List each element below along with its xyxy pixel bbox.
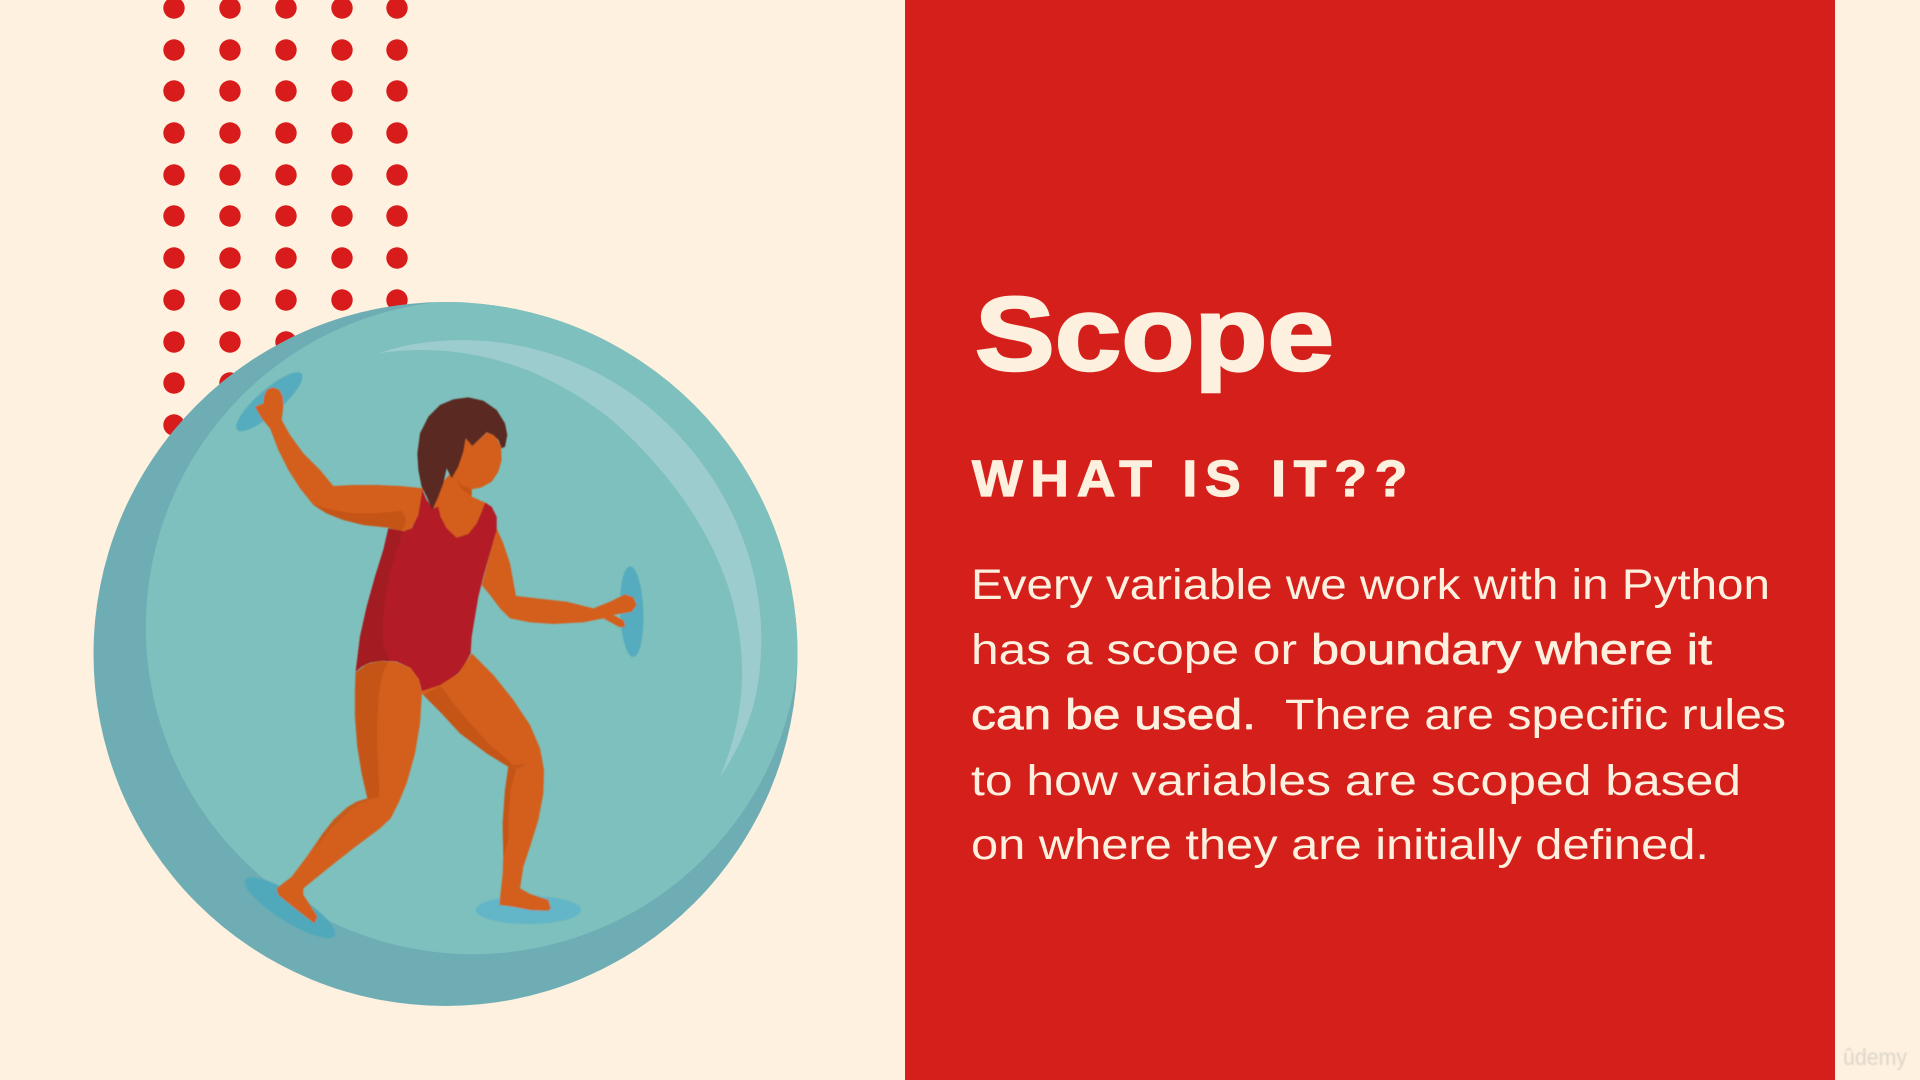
front leg [277,661,422,923]
body text: There are specific rules [1285,691,1786,739]
back leg [420,653,551,911]
body text: has a scope or [971,626,1297,674]
foot disc left [238,868,342,947]
bubble inner fill [146,300,800,954]
outstretched arm [482,528,637,627]
body text: on where they are initially defined. [971,821,1709,869]
back thigh shadow [423,686,527,768]
person: legs [238,653,581,947]
bubble highlight [380,340,761,777]
dot pattern [163,0,408,436]
body text: to how variables are scoped based [971,757,1741,805]
panel: red content panel [905,0,1835,1080]
swimsuit shadow [356,528,403,672]
body text: can be used. [971,691,1256,739]
raised arm shadow [313,505,406,531]
bubble outer shell [94,302,798,1006]
front thigh shadow [355,661,388,798]
body text [971,561,1786,869]
illustration: person in bubble [94,300,800,1006]
foot disc right [476,896,581,924]
neck and chest [430,470,488,550]
hair [417,397,507,510]
hand disc right [618,566,645,657]
back calf shadow [503,767,516,857]
subheading: WHAT IS IT?? [972,451,1415,508]
title: Scope [975,276,1334,393]
swimsuit [356,490,497,692]
hand disc left [229,365,309,439]
face [453,433,502,489]
body text: Every variable we work with in Python [971,561,1770,609]
watermark: ûdemy [1843,1044,1907,1070]
neck shadow [453,475,472,496]
raised arm [255,387,423,531]
front calf shadow [313,797,379,852]
person: upper body [229,365,645,692]
body text: boundary where it [1311,626,1712,674]
